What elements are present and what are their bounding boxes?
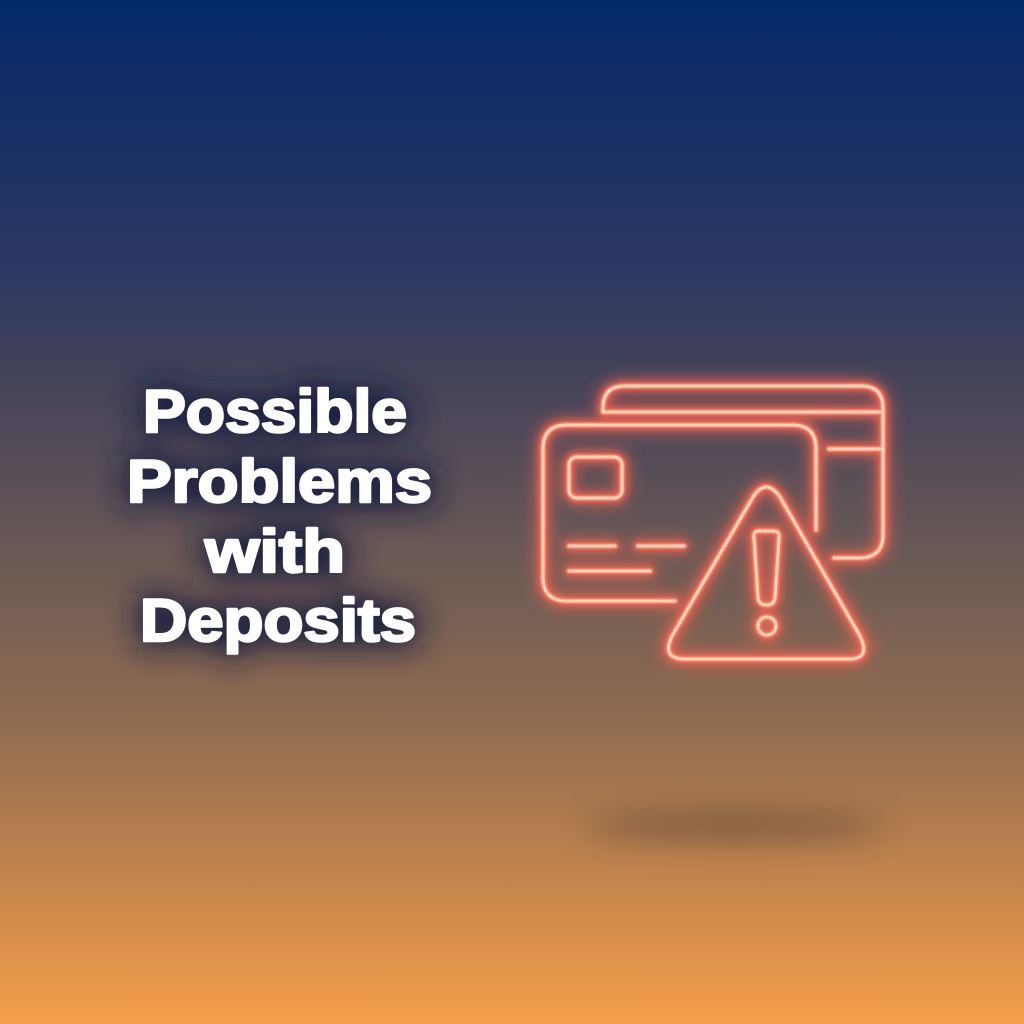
title dark glow: Deposits [140, 587, 416, 654]
title dark glow [127, 378, 432, 654]
title text: Possible [143, 378, 407, 445]
title text: Deposits [140, 587, 416, 654]
title dark glow: Problems [127, 448, 432, 515]
floating shadow [585, 813, 885, 839]
title dark glow: Possible [143, 378, 407, 445]
title text [127, 378, 432, 654]
icon: neon credit cards with warning triangle [543, 386, 883, 659]
title [127, 378, 432, 654]
title text: with [204, 518, 345, 585]
title text: Problems [127, 448, 432, 515]
title dark glow: with [204, 518, 345, 585]
